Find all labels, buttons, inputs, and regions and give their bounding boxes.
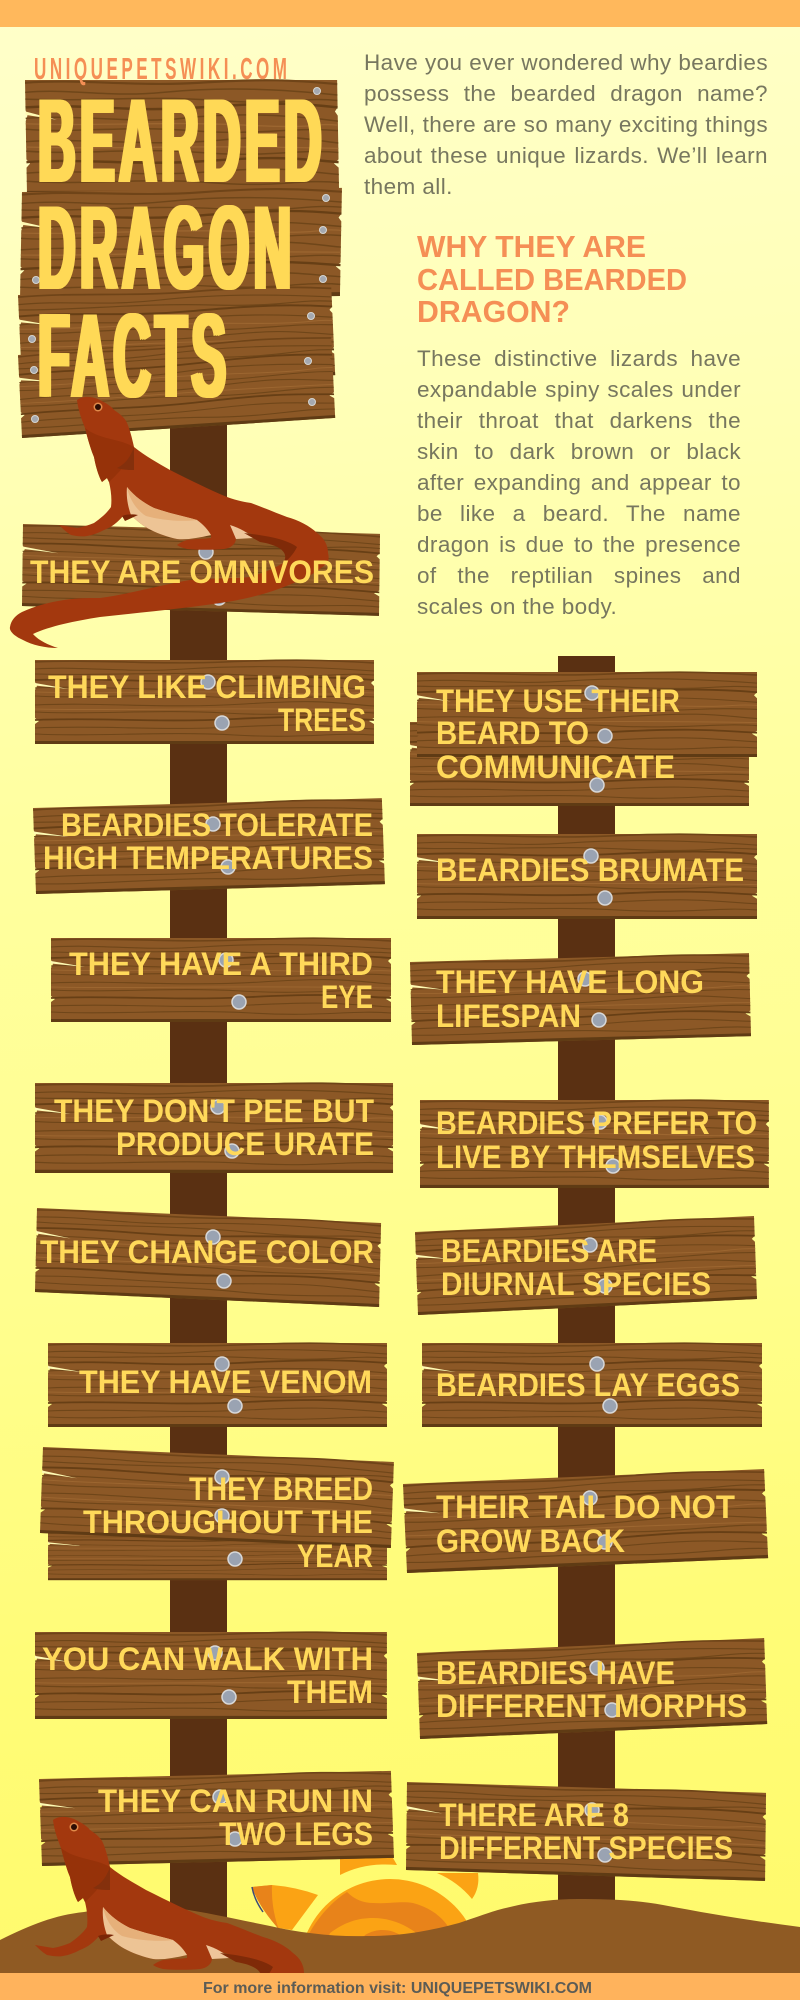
explanation paragraph [417, 346, 741, 619]
sign: you can walk with them [35, 1632, 387, 1719]
main title [38, 74, 326, 423]
sign: beardies are diurnal species: BEARDIES ARE [441, 1233, 657, 1269]
sign: they like climbing trees [35, 660, 374, 744]
right post [558, 656, 615, 1946]
explanation paragraph: scales on the body. [417, 594, 617, 619]
intro paragraph: Well, there are so many exciting things [364, 112, 768, 137]
main title: BEARDED [38, 74, 326, 208]
sign: beardies tolerate high temperatures: BEARDIES TOLERATE [61, 807, 373, 843]
intro paragraph: them all. [364, 174, 453, 199]
explanation paragraph: skin to dark brown or black [417, 439, 741, 464]
sign: their tail do not grow back: THEIR TAIL DO NOT [436, 1489, 735, 1525]
sign: you can walk with them: THEM [287, 1674, 373, 1710]
intro paragraph: Have you ever wondered why beardies [364, 50, 768, 75]
sign: they use their beard to communicate: BEARD TO [436, 715, 589, 751]
lizard on the ground [0, 1817, 305, 2000]
sign: beardies prefer to live by themselves: BEARDIES PREFER TO [436, 1105, 757, 1141]
explanation paragraph: These distinctive lizards have [417, 346, 741, 371]
explanation paragraph: their throat that darkens the [417, 408, 741, 433]
sign: they can run in two legs: TWO LEGS [219, 1816, 373, 1852]
sign: they breed throughout the year: THEY BREED [189, 1471, 373, 1507]
sign: there are 8 different species: THERE ARE 8 [439, 1797, 629, 1833]
sign: they don't pee but produce urate: PRODUCE URATE [116, 1126, 374, 1162]
omnivores label: THEY ARE OMNIVORES [30, 554, 374, 590]
section heading: DRAGON? [417, 294, 570, 329]
sign: beardies brumate: BEARDIES BRUMATE [436, 852, 744, 888]
sign: beardies have different morphs: BEARDIES HAVE [436, 1655, 675, 1691]
title sign nails [28, 88, 330, 422]
sun [252, 1858, 481, 2000]
sign: they breed throughout the year: YEAR [297, 1538, 373, 1574]
explanation paragraph: be like a beard. The name [417, 501, 741, 526]
sign: they change color [35, 1208, 381, 1307]
sign: they use their beard to communicate: COMMUNICATE [436, 749, 675, 785]
sign: their tail do not grow back [403, 1469, 768, 1573]
sign: they can run in two legs [39, 1771, 394, 1866]
title sign wood [18, 80, 342, 438]
intro paragraph: possess the bearded dragon name? [364, 81, 768, 106]
sign: beardies prefer to live by themselves [420, 1100, 769, 1188]
sign: they are omnivores [22, 524, 380, 616]
explanation paragraph: of the reptilian spines and [417, 563, 741, 588]
sign: they have a third eye [51, 938, 391, 1022]
main title: DRAGON [38, 181, 296, 315]
sign: there are 8 different species [406, 1782, 766, 1881]
sign: beardies are diurnal species: DIURNAL SPECIES [441, 1266, 711, 1302]
left post [170, 400, 227, 1960]
site name: UNIQUEPETSWIKI.COM [34, 52, 287, 86]
top bar [0, 0, 800, 27]
sign: they change color: THEY CHANGE COLOR [40, 1234, 374, 1270]
sign: they breed throughout the year: THROUGHOUT THE [83, 1504, 373, 1540]
sign: beardies lay eggs [422, 1343, 762, 1427]
explanation paragraph: dragon is due to the presence [417, 532, 741, 557]
section heading: WHY THEY ARE [417, 229, 646, 264]
sign: they don't pee but produce urate: THEY DON'T PEE BUT [54, 1093, 374, 1129]
sign: beardies tolerate high temperatures: HIGH TEMPERATURES [43, 840, 373, 876]
sign: beardies lay eggs: BEARDIES LAY EGGS [436, 1367, 740, 1403]
sign: they like climbing trees: TREES [278, 702, 366, 738]
main title: FACTS [38, 289, 230, 423]
sign: they use their beard to communicate [410, 672, 757, 806]
footer text: For more information visit: UNIQUEPETSWIKI.COM [203, 1980, 592, 1997]
lizard on the omnivores sign [10, 397, 329, 648]
sign: beardies have different morphs: DIFFERENT MORPHS [436, 1688, 747, 1724]
sign: beardies are diurnal species [415, 1216, 757, 1315]
sign: they have a third eye: THEY HAVE A THIRD [69, 946, 373, 982]
footer bar [0, 1973, 800, 2000]
explanation paragraph: expandable spiny scales under [417, 377, 741, 402]
ground hill [0, 1899, 800, 1975]
sign: their tail do not grow back: GROW BACK [436, 1523, 625, 1559]
sign: they use their beard to communicate: THEY USE THEIR [436, 683, 680, 719]
sign: they have long lifespan: THEY HAVE LONG [436, 964, 704, 1000]
sign: beardies prefer to live by themselves: LIVE BY THEMSELVES [436, 1139, 755, 1175]
intro paragraph: about these unique lizards. We’ll learn [364, 143, 768, 168]
sign: they breed throughout the year [40, 1447, 394, 1580]
sign: they can run in two legs: THEY CAN RUN IN [98, 1783, 373, 1819]
sign: you can walk with them: YOU CAN WALK WITH [42, 1641, 373, 1677]
section heading [417, 229, 687, 329]
explanation paragraph: after expanding and appear to [417, 470, 741, 495]
sign: they like climbing trees: THEY LIKE CLIMBING [48, 669, 366, 705]
sign: beardies have different morphs [417, 1638, 767, 1739]
sign: they have a third eye: EYE [321, 979, 373, 1015]
sign: they have venom: THEY HAVE VENOM [79, 1364, 372, 1400]
sign: there are 8 different species: DIFFERENT SPECIES [439, 1830, 733, 1866]
sign: they have long lifespan [410, 953, 751, 1045]
sign: beardies tolerate high temperatures [33, 798, 385, 894]
sign: beardies brumate [417, 834, 757, 919]
sign: they have long lifespan: LIFESPAN [436, 998, 581, 1034]
sign: they don't pee but produce urate [35, 1083, 393, 1173]
intro paragraph [364, 50, 768, 199]
sign: they have venom [48, 1343, 387, 1427]
section heading: CALLED BEARDED [417, 262, 687, 297]
